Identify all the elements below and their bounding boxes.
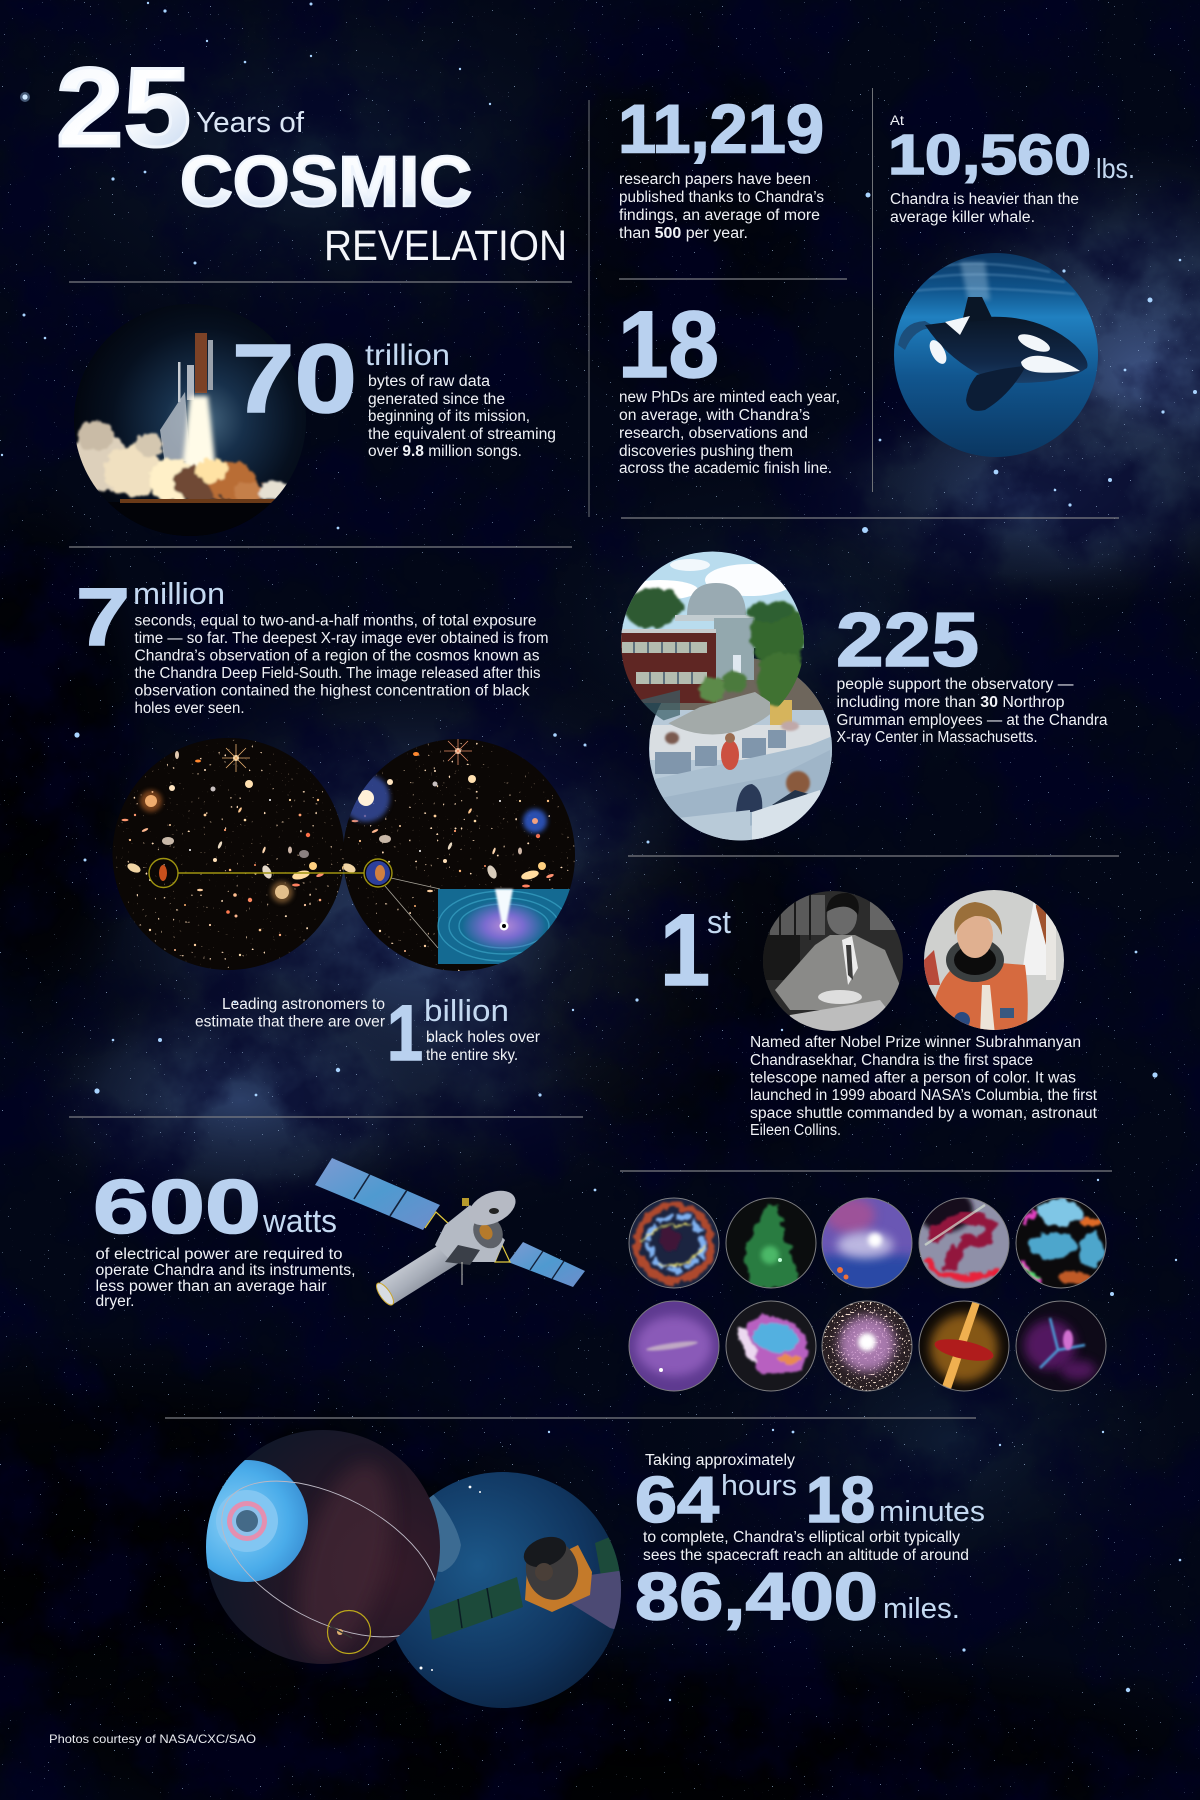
intro text: leading astronomers: Leading astronomers to <box>222 996 385 1013</box>
description text: the entire sky. <box>426 1047 518 1064</box>
description text <box>619 171 824 242</box>
thumbnail 6: purple galaxy <box>630 1302 718 1390</box>
description text: than 500 per year. <box>619 225 748 242</box>
number 7: 7 <box>76 572 130 663</box>
photo: control room <box>645 655 835 845</box>
description text: operate Chandra and its instruments, <box>96 1262 356 1279</box>
number 18: 18 <box>618 292 719 398</box>
thumbnail 3: galactic center <box>822 1198 912 1288</box>
description text: findings, an average of more <box>619 207 820 224</box>
panel: 7 million seconds <box>76 572 580 1077</box>
description text: new PhDs are minted each year, <box>619 389 840 406</box>
description text: seconds, equal to two-and-a-half months, of total exposure <box>134 612 536 630</box>
panel: first person of color namesake <box>660 888 1098 1139</box>
label At: At <box>890 113 904 128</box>
panel: title <box>56 45 567 270</box>
photo: orca <box>890 250 1102 460</box>
photo: deep field left <box>110 735 356 975</box>
panel: 600 watts <box>93 1158 585 1310</box>
photo: Subrahmanyan Chandrasekhar <box>760 888 906 1034</box>
description text <box>96 1246 356 1310</box>
description text <box>368 373 556 460</box>
illustration: orbit diagram <box>186 1428 463 1669</box>
description text: Grumman employees — at the Chandra <box>836 712 1108 729</box>
number 1 billion: 1 <box>387 988 423 1077</box>
panel: 70 trillion bytes of data <box>70 300 556 544</box>
panel: 11,219 research papers <box>618 90 824 242</box>
description text: sees the spacecraft reach an altitude of around <box>643 1547 969 1564</box>
description text: Chandra is heavier than the <box>890 191 1079 208</box>
ordinal st: st <box>707 904 731 940</box>
description text: bytes of raw data <box>368 373 490 390</box>
description text: Chandrasekhar, Chandra is the first space <box>750 1052 1033 1069</box>
unit miles.: miles. <box>883 1593 960 1625</box>
number 18 minutes: 18 <box>806 1463 875 1536</box>
thumbnail 2: green cluster <box>726 1198 816 1288</box>
description text: launched in 1999 aboard NASA’s Columbia, the first <box>750 1087 1098 1104</box>
connector lines to inset <box>385 878 440 948</box>
title numeral 25: 25 <box>56 45 191 170</box>
description text: discoveries pushing them <box>619 443 793 460</box>
number 86,400: 86,400 <box>635 1560 878 1634</box>
label billion: billion <box>424 993 509 1028</box>
description text: on average, with Chandra’s <box>619 407 810 424</box>
description text: across the academic finish line. <box>619 460 832 477</box>
description text: dryer. <box>96 1293 134 1310</box>
unit lbs.: lbs. <box>1096 153 1135 184</box>
description text: people support the observatory — <box>836 676 1074 693</box>
description text: to complete, Chandra’s elliptical orbit typically <box>643 1529 960 1546</box>
panel: 10,560 lbs killer whale <box>888 113 1135 460</box>
description text: including more than 30 Northrop <box>836 694 1064 711</box>
number 11,219: 11,219 <box>618 90 824 168</box>
number 225: 225 <box>836 598 979 683</box>
number 64: 64 <box>635 1463 719 1536</box>
unit minutes: minutes <box>879 1496 985 1528</box>
description text: holes ever seen. <box>134 700 244 717</box>
panel: grid of Chandra images <box>625 1188 1109 1394</box>
illustration: spacecraft over Earth limb <box>380 1470 625 1710</box>
description text <box>750 1034 1098 1139</box>
intro text: leading astronomers <box>195 996 385 1030</box>
description text: published thanks to Chandra’s <box>619 189 824 206</box>
description text: less power than an average hair <box>96 1278 326 1295</box>
description text <box>890 191 1079 226</box>
thumbnail 7: multicolor remnant <box>726 1302 816 1390</box>
thumbnail 4: crimson remnant <box>920 1198 1008 1288</box>
description text: average killer whale. <box>890 209 1035 226</box>
panel: 225 people <box>618 548 1108 845</box>
description text <box>836 676 1108 746</box>
photo: observatory building <box>618 548 808 740</box>
description text: over 9.8 million songs. <box>368 443 522 460</box>
description text <box>643 1529 969 1564</box>
description text: space shuttle commanded by a woman, astronaut <box>750 1105 1098 1122</box>
title: COSMIC: COSMIC <box>180 143 472 222</box>
title: Years of: Years of <box>196 107 305 139</box>
description text <box>426 1029 540 1064</box>
panel: 18 new PhDs <box>618 292 840 477</box>
thumbnail 8: globular cluster <box>822 1302 912 1390</box>
label trillion: trillion <box>365 339 450 372</box>
number 1: 1 <box>660 893 710 1007</box>
description text: black holes over <box>426 1029 540 1046</box>
label million: million <box>133 576 225 611</box>
description text: the Chandra Deep Field-South. The image released after this <box>134 665 541 682</box>
description text: telescope named after a person of color. It was <box>750 1070 1076 1086</box>
footer credit: Photos courtesy of NASA/CXC/SAO <box>49 1732 256 1746</box>
thumbnail outlines <box>629 1198 1106 1391</box>
title: REVELATION: REVELATION <box>324 222 567 270</box>
unit hours: hours <box>721 1470 797 1502</box>
number 10,560: 10,560 <box>888 123 1091 187</box>
panel: orbit <box>186 1428 985 1710</box>
thumbnail 1: supernova remnant <box>630 1198 718 1288</box>
marker: spacecraft ring <box>328 1610 370 1654</box>
thumbnail 5: cyan blobs <box>1016 1198 1106 1288</box>
number 600: 600 <box>93 1165 261 1250</box>
description text: X-ray Center in Massachusetts. <box>836 729 1038 746</box>
description text: Eileen Collins. <box>750 1122 841 1139</box>
number 70: 70 <box>232 324 357 433</box>
description text <box>619 389 840 477</box>
photo: deep field right <box>340 735 580 975</box>
description text: research, observations and <box>619 425 808 442</box>
intro text: leading astronomers: estimate that there are over <box>195 1014 385 1030</box>
unit watts: watts <box>262 1203 337 1239</box>
description text: generated since the <box>368 391 505 408</box>
thumbnail 10: magenta filaments <box>1016 1302 1106 1390</box>
description text: observation contained the highest concentration of black <box>134 682 530 700</box>
inset: black hole illustration <box>438 889 573 964</box>
marker: yellow rings and connector <box>149 858 392 888</box>
description text: research papers have been <box>619 171 811 188</box>
photo: shuttle launch <box>74 308 304 536</box>
text: taking approximately: Taking approximately <box>645 1452 795 1469</box>
description text <box>134 612 548 717</box>
description text: Named after Nobel Prize winner Subrahmanyan <box>750 1034 1081 1051</box>
description text: beginning of its mission, <box>368 408 530 425</box>
photo: Eileen Collins <box>920 888 1068 1035</box>
description text: time — so far. The deepest X-ray image ever obtained is from <box>134 630 548 647</box>
illustration: Chandra spacecraft <box>315 1158 585 1308</box>
thumbnail 9: jet and torus <box>920 1302 1008 1390</box>
description text: Chandra’s observation of a region of the cosmos known as <box>134 648 540 664</box>
description text: the equivalent of streaming <box>368 426 556 443</box>
description text: of electrical power are required to <box>96 1246 342 1263</box>
